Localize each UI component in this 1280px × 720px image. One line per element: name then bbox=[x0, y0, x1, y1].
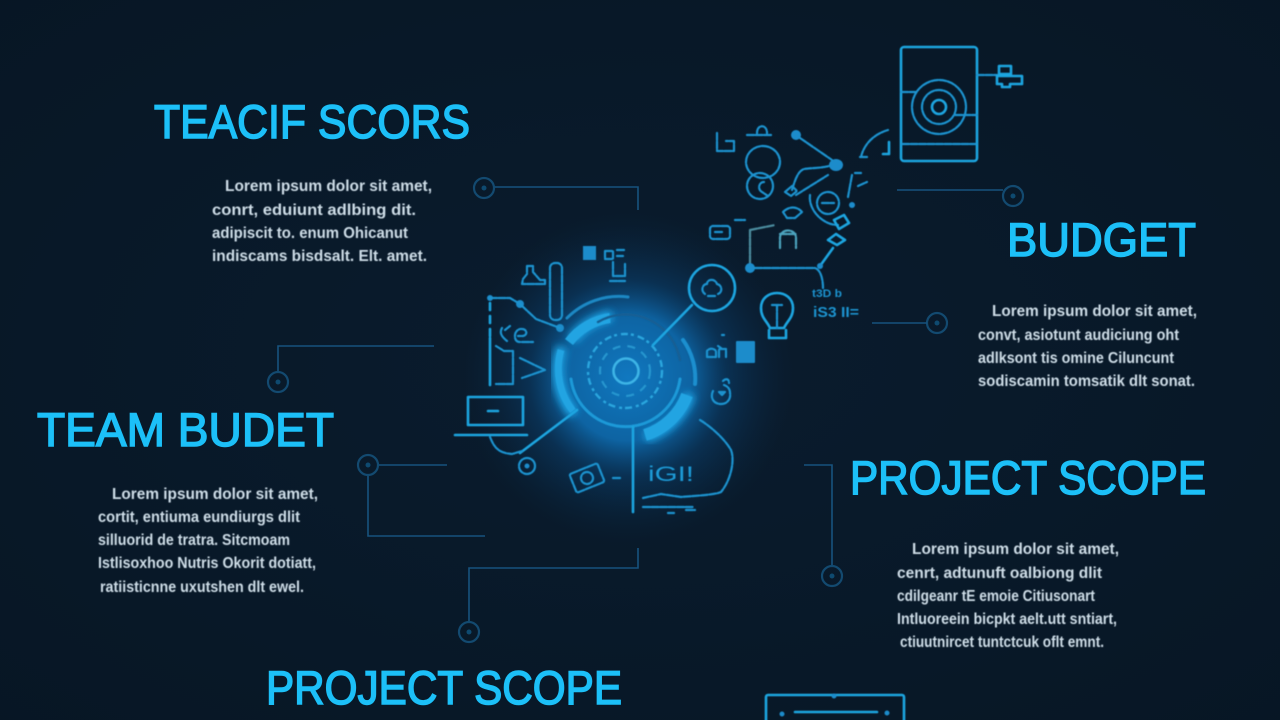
icon: small bracket right bbox=[883, 142, 889, 154]
text block: budget: adlksont tis omine Ciluncunt bbox=[978, 350, 1174, 367]
icon: glyph row: iS3 II= bbox=[813, 304, 859, 321]
icon: money note bbox=[569, 463, 605, 493]
circuit vertical bbox=[750, 225, 775, 268]
central icon cluster bbox=[455, 246, 755, 513]
curve to gear bbox=[490, 437, 522, 454]
text block: project scope right: cenrt, adtunuft oalbiong dlit bbox=[897, 565, 1102, 582]
connector: team budet lower bbox=[358, 455, 485, 536]
heading: project scope right: PROJECT SCOPE bbox=[850, 451, 1206, 504]
text block: team budet: ratiisticnne uxutshen dlt ewel. bbox=[100, 579, 304, 596]
text block: budget bbox=[978, 303, 1197, 390]
icon: small card bbox=[710, 220, 745, 239]
connector: team budet bbox=[268, 346, 434, 392]
icon: small glyphs bbox=[501, 326, 533, 342]
text block: budget: Lorem ipsum dolor sit amet, bbox=[992, 303, 1197, 320]
text block: project scope right: Intluoreein bicpkt aelt.utt sntiart, bbox=[897, 611, 1117, 628]
icon: small blobs bbox=[783, 175, 855, 218]
text block: teacif scors bbox=[212, 178, 432, 265]
text block: teacif scors: conrt, eduiunt adlbing dit. bbox=[212, 202, 416, 219]
text block: budget: convt, asiotunt audiciung oht bbox=[978, 327, 1179, 344]
hub glow arcs bbox=[558, 316, 690, 437]
icon: dashed connector bbox=[489, 303, 491, 337]
connector: budget upper bbox=[897, 186, 1023, 206]
hub thin rings bbox=[567, 296, 695, 427]
dashed circuit right bbox=[643, 420, 733, 498]
connector: project scope bottom bbox=[459, 548, 638, 642]
text block: team budet: Istlisoxhoo Nutris Okorit dotiatt, bbox=[98, 555, 316, 572]
icon: bottom panel bbox=[766, 694, 904, 720]
heading: budget: BUDGET bbox=[1007, 213, 1196, 266]
circuit base bbox=[643, 507, 695, 513]
icon: square bbox=[736, 341, 755, 363]
spoke upper right bbox=[653, 305, 692, 345]
icon: chevron bbox=[520, 358, 545, 378]
dashed curve to bracket bbox=[855, 130, 888, 173]
heading: project scope bottom: PROJECT SCOPE bbox=[266, 661, 622, 714]
icon: iGI glyphs: iGI! bbox=[648, 463, 694, 486]
text block: teacif scors: indiscams bisdsalt. Elt. amet. bbox=[212, 248, 427, 265]
icon: tablet target bbox=[901, 47, 977, 161]
circuit node bbox=[745, 263, 823, 288]
text block: team budet: Lorem ipsum dolor sit amet, bbox=[112, 486, 318, 503]
text block: project scope right: ctiuutnircet tuntctcuk oflt emnt. bbox=[900, 634, 1104, 651]
text block: budget: sodiscamin tomsatik dlt sonat. bbox=[978, 373, 1195, 390]
text block: team budet: silluorid de tratra. Sitcmoam bbox=[98, 532, 290, 549]
connector: project scope right bbox=[804, 465, 842, 586]
hub thick arcs bbox=[558, 318, 687, 435]
hub gear ring bbox=[588, 334, 662, 408]
heading: team budet: TEAM BUDET bbox=[37, 403, 334, 456]
text block: project scope right bbox=[897, 541, 1119, 651]
spoke vertical bbox=[632, 427, 634, 512]
icon: head figure bbox=[746, 126, 780, 199]
small glyphs: t3D b bbox=[812, 288, 842, 300]
text block: team budet: cortit, entiuma eundiurgs dlit bbox=[98, 509, 300, 526]
icon: flask bbox=[522, 266, 545, 284]
connector: teacif scors bbox=[474, 178, 638, 210]
icon: document bars bbox=[490, 338, 513, 385]
icon: laptop bbox=[455, 397, 527, 435]
icon: chart blocks bbox=[583, 246, 625, 281]
icon: arch bbox=[780, 230, 796, 248]
icon: people glyph bbox=[707, 335, 726, 357]
text block: teacif scors: Lorem ipsum dolor sit amet, bbox=[225, 178, 432, 195]
text block: project scope right: cdilgeanr tE emoie Citiusonart bbox=[897, 588, 1095, 605]
icon: small bracket bbox=[717, 133, 734, 151]
connector: budget lower bbox=[872, 313, 947, 333]
icon: small marker bbox=[858, 182, 867, 186]
icon: tablet plug bbox=[977, 66, 1022, 87]
icon: node circle bbox=[689, 265, 735, 311]
hub center ring bbox=[614, 358, 638, 384]
icon: gear small bbox=[519, 458, 535, 474]
central hub dial bbox=[558, 296, 695, 437]
dash mark bbox=[613, 477, 621, 479]
spoke lower left bbox=[520, 410, 577, 453]
text block: teacif scors: adipiscit to. enum Ohicanut bbox=[212, 225, 408, 242]
central glow bbox=[463, 213, 793, 543]
node chain top bbox=[791, 130, 843, 190]
hub gear teeth bbox=[600, 346, 650, 396]
icon: tube bbox=[550, 263, 562, 320]
icon: chain bbox=[820, 215, 849, 266]
text block: team budet bbox=[98, 486, 318, 596]
heading: teacif scors: TEACIF SCORS bbox=[154, 95, 470, 148]
top right icon cluster bbox=[710, 47, 1022, 338]
text block: project scope right: Lorem ipsum dolor sit amet, bbox=[912, 541, 1119, 558]
icon: shield glyph bbox=[712, 379, 730, 404]
icon: circle gear bbox=[796, 175, 839, 225]
icon: light bulb bbox=[761, 293, 793, 338]
node line left bbox=[487, 295, 564, 332]
